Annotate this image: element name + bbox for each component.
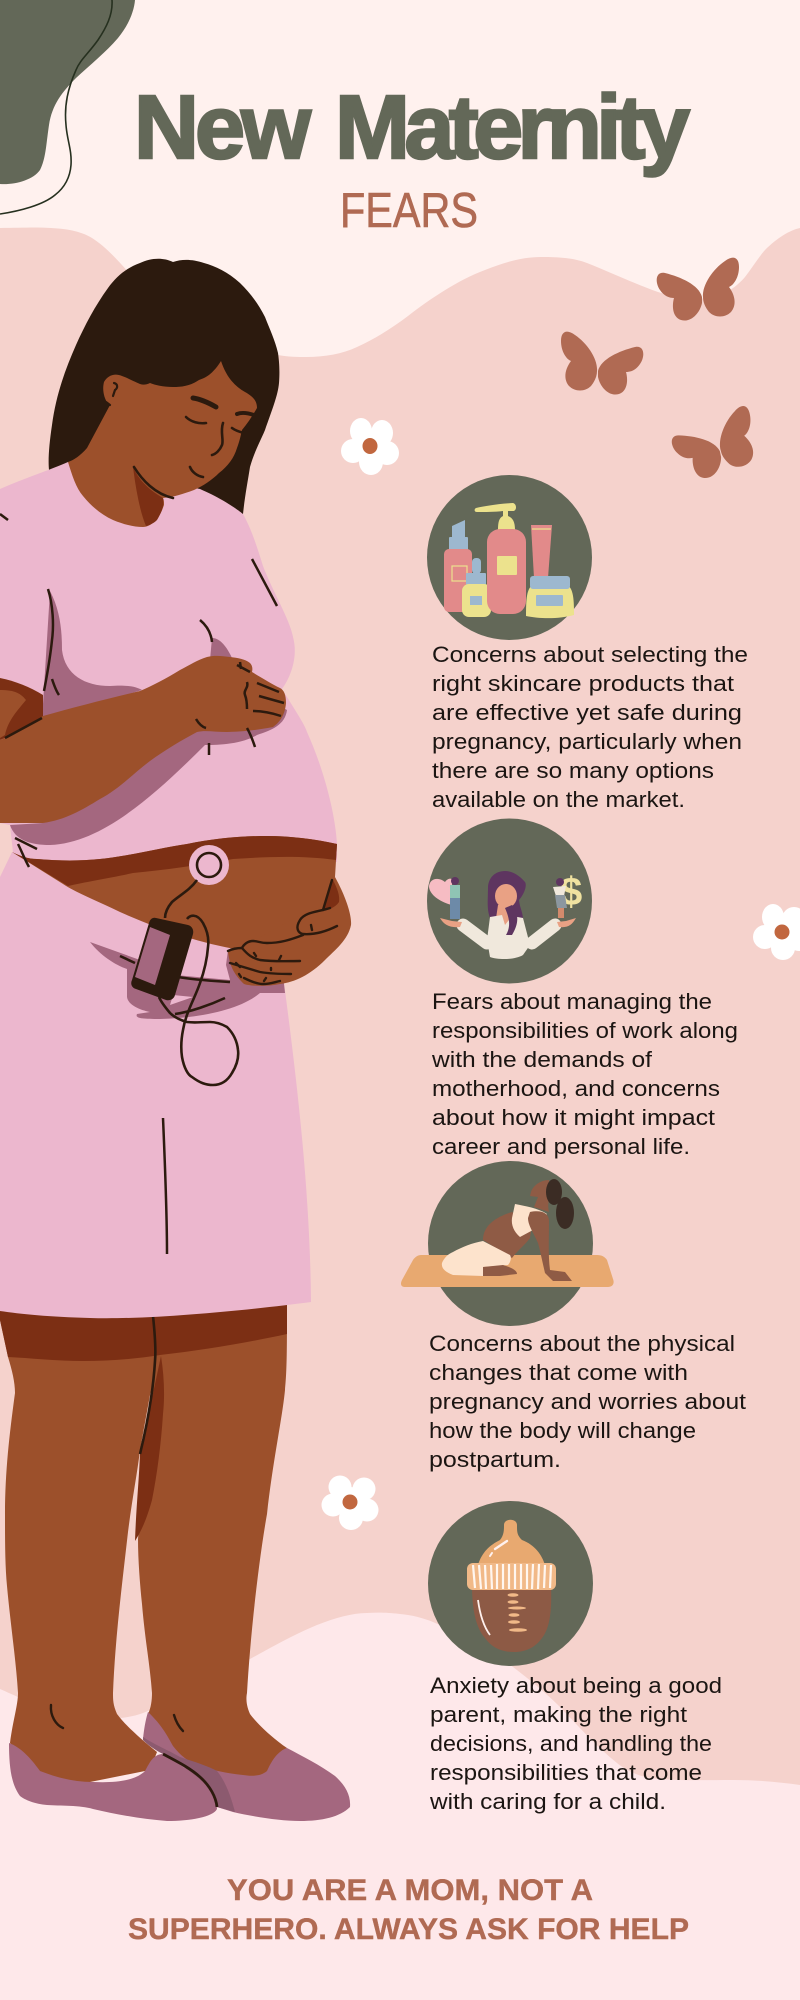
flower 1 bbox=[341, 418, 399, 475]
butterfly 3 bbox=[667, 405, 761, 484]
panel: physical change concerns bbox=[401, 1161, 746, 1472]
footer message bbox=[128, 1874, 689, 1946]
text: parenting: responsibilities that come bbox=[430, 1760, 702, 1785]
icon: woman balancing love and money bbox=[427, 818, 592, 984]
footer message: SUPERHERO. ALWAYS ASK FOR HELP bbox=[128, 1913, 689, 1946]
panel: work and motherhood concerns bbox=[427, 818, 738, 1159]
decorative green blob bbox=[0, 0, 135, 214]
panel: skincare concerns bbox=[427, 475, 748, 812]
text: physical: Concerns about the physical bbox=[429, 1331, 735, 1356]
text: physical: postpartum. bbox=[429, 1447, 561, 1472]
text: physical bbox=[429, 1331, 746, 1472]
text: work: with the demands of bbox=[431, 1047, 653, 1072]
belly skin bbox=[12, 836, 337, 950]
flower 2 bbox=[753, 904, 800, 960]
monitor patch bbox=[189, 845, 229, 885]
upper arm back bbox=[0, 678, 43, 740]
hair bbox=[49, 259, 279, 514]
text: skincare: there are so many options bbox=[432, 758, 714, 783]
text: parenting: Anxiety about being a good bbox=[430, 1673, 722, 1698]
text: work: about how it might impact bbox=[432, 1105, 715, 1130]
lower hand bbox=[228, 877, 351, 986]
left shoe bbox=[9, 1743, 217, 1821]
title bbox=[134, 78, 690, 178]
icon: prenatal yoga bbox=[401, 1161, 614, 1326]
text: parenting bbox=[429, 1673, 722, 1814]
butterfly 1 bbox=[657, 258, 739, 321]
icon: woman balancing love and money: $ bbox=[560, 870, 582, 914]
text: skincare: available on the market. bbox=[432, 787, 685, 812]
text: work: career and personal life. bbox=[432, 1134, 690, 1159]
legs bbox=[0, 1295, 287, 1790]
title: New bbox=[134, 78, 312, 178]
dress hem notch bbox=[170, 995, 193, 1005]
text: skincare bbox=[432, 642, 748, 812]
flower 3 bbox=[322, 1476, 378, 1530]
text: work: motherhood, and concerns bbox=[432, 1076, 720, 1101]
line details on clothing and arm bbox=[0, 514, 284, 1254]
butterfly 2 bbox=[561, 332, 643, 395]
pregnant woman illustration bbox=[0, 259, 351, 1821]
arm and hand bbox=[0, 656, 286, 823]
text: skincare: Concerns about selecting the bbox=[432, 642, 748, 667]
face bbox=[68, 361, 257, 527]
right shoe bbox=[143, 1712, 350, 1821]
subtitle: FEARS bbox=[340, 184, 478, 238]
icon: skincare products bbox=[427, 475, 592, 640]
text: parenting: with caring for a child. bbox=[429, 1789, 666, 1814]
text: parenting: decisions, and handling the bbox=[430, 1731, 712, 1756]
dress upper bbox=[0, 462, 337, 862]
title: Maternity bbox=[335, 78, 690, 178]
panel: parenting anxiety bbox=[428, 1501, 722, 1814]
dress shadows bbox=[10, 591, 287, 1019]
text: parenting: parent, making the right bbox=[430, 1702, 687, 1727]
monitor device bbox=[120, 880, 238, 1085]
text: work: Fears about managing the bbox=[432, 989, 712, 1014]
text: physical: changes that come with bbox=[429, 1360, 688, 1385]
text: physical: how the body will change bbox=[429, 1418, 696, 1443]
dress lower bbox=[0, 852, 311, 1318]
icon: baby bottle bbox=[428, 1501, 593, 1666]
text: skincare: right skincare products that bbox=[432, 671, 734, 696]
text: work bbox=[431, 989, 738, 1159]
footer message: YOU ARE A MOM, NOT A bbox=[227, 1874, 593, 1907]
text: physical: pregnancy and worries about bbox=[429, 1389, 746, 1414]
text: work: responsibilities of work along bbox=[432, 1018, 738, 1043]
text: skincare: pregnancy, particularly when bbox=[432, 729, 742, 754]
text: skincare: are effective yet safe during bbox=[432, 700, 742, 725]
